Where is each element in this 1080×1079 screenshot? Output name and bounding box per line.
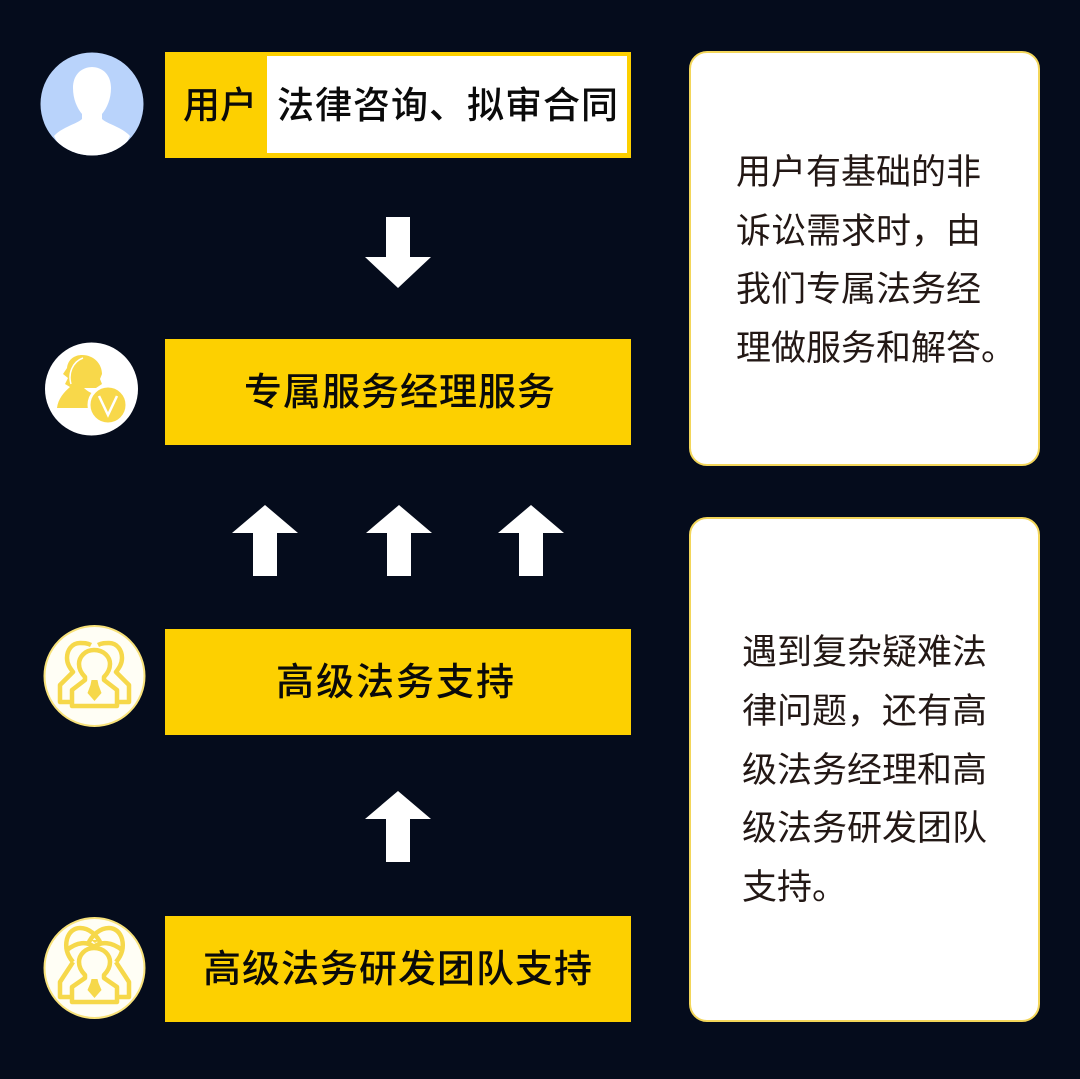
text: basic service description: 我们专属法务经 — [736, 270, 981, 309]
arrow: up center — [366, 505, 432, 576]
text: senior support description: 遇到复杂疑难法 — [742, 633, 987, 672]
text: senior support description: 级法务经理和高 — [742, 751, 987, 790]
arrow: up left — [232, 505, 298, 576]
arrow: up to senior support — [365, 791, 431, 862]
arrow: down to manager — [365, 217, 431, 288]
text: senior support description: 律问题，还有高 — [742, 692, 987, 731]
white request box — [267, 56, 627, 153]
text: research team support: 高级法务研发团队支持 — [203, 949, 593, 991]
bar: research team support — [165, 916, 631, 1022]
panel: description of senior support — [689, 517, 1040, 1022]
text: dedicated manager service: 专属服务经理服务 — [244, 372, 556, 414]
text: senior support description: 支持。 — [742, 868, 847, 907]
panel: user request bar — [165, 52, 631, 158]
text: basic service description: 用户有基础的非 — [736, 153, 981, 192]
panel: description of basic service — [689, 51, 1040, 466]
icon: user avatar — [40, 52, 144, 156]
text: senior support description — [742, 633, 987, 907]
icon: service manager — [45, 342, 138, 436]
text: senior support description: 级法务研发团队 — [742, 809, 987, 848]
text: basic service description — [736, 153, 1016, 368]
text: senior legal support: 高级法务支持 — [276, 662, 516, 704]
bar: senior legal support — [165, 629, 631, 735]
bar: dedicated manager service — [165, 339, 631, 445]
text: basic service description: 理做服务和解答。 — [736, 328, 1016, 368]
icon: senior legal group — [44, 625, 146, 727]
icon: research team — [44, 917, 146, 1019]
arrow: up right — [498, 505, 564, 576]
text: basic service description: 诉讼需求时，由 — [736, 212, 981, 250]
label: user: 用户 — [183, 85, 257, 126]
text: legal request: 法律咨询、拟审合同 — [277, 85, 619, 126]
